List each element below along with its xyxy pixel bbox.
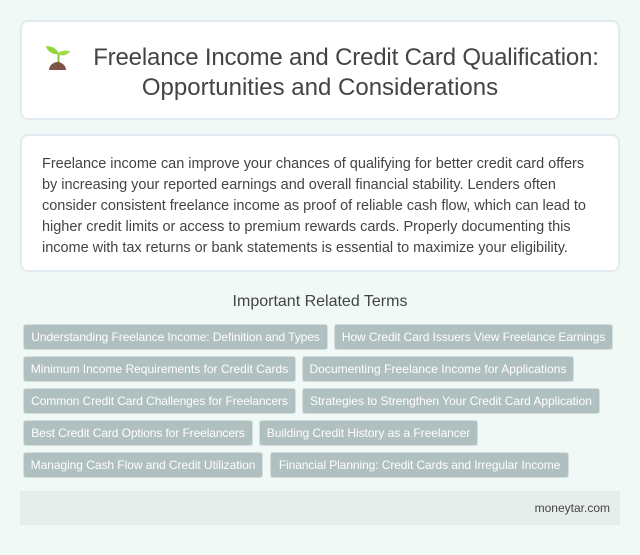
text block: summary: income with tax returns or bank statements is essential to maximize your eligibility. <box>42 240 568 256</box>
text block: summary: by increasing your reported earnings and overall financial stability. Lenders often <box>42 177 556 193</box>
title: Opportunities and Considerations <box>142 74 498 101</box>
icon: seedling <box>46 46 70 70</box>
panel: related term tags <box>23 324 613 478</box>
tag: Financial Planning: Credit Cards and Irregular Income <box>279 458 560 472</box>
tag <box>23 388 296 414</box>
panel: title card <box>20 20 620 120</box>
tag <box>270 452 569 478</box>
tag <box>23 356 296 382</box>
tag: Common Credit Card Challenges for Freelancers <box>31 394 288 408</box>
heading: related terms: Important Related Terms <box>233 293 407 310</box>
footer: site name: moneytar.com <box>535 501 610 515</box>
text block: summary: Freelance income can improve your chances of qualifying for better credit card offers <box>42 156 584 172</box>
tag: Documenting Freelance Income for Applications <box>309 362 567 376</box>
tag <box>23 452 263 478</box>
tag: Strategies to Strengthen Your Credit Card Application <box>310 394 592 408</box>
tag: Understanding Freelance Income: Definition and Types <box>31 330 320 344</box>
title <box>93 44 599 101</box>
tag <box>259 420 478 446</box>
tag: How Credit Card Issuers View Freelance Earnings <box>342 330 605 344</box>
tag: Building Credit History as a Freelancer <box>267 426 470 440</box>
text block: summary: higher credit limits or access to premium rewards cards. Properly documenting this <box>42 219 571 235</box>
tag: Best Credit Card Options for Freelancers <box>31 426 245 440</box>
tag: Minimum Income Requirements for Credit Cards <box>31 362 288 376</box>
tag: Managing Cash Flow and Credit Utilization <box>31 458 255 472</box>
tag <box>23 420 253 446</box>
tag <box>334 324 613 350</box>
footer bar <box>20 491 620 525</box>
panel: summary card <box>20 134 620 272</box>
title: Freelance Income and Credit Card Qualification: <box>93 44 599 71</box>
text block: summary: consider consistent freelance income as proof of reliable cash flow, which can lead to <box>42 198 586 214</box>
tag <box>302 388 600 414</box>
text block: summary <box>42 156 586 256</box>
tag <box>23 324 328 350</box>
tag <box>302 356 574 382</box>
